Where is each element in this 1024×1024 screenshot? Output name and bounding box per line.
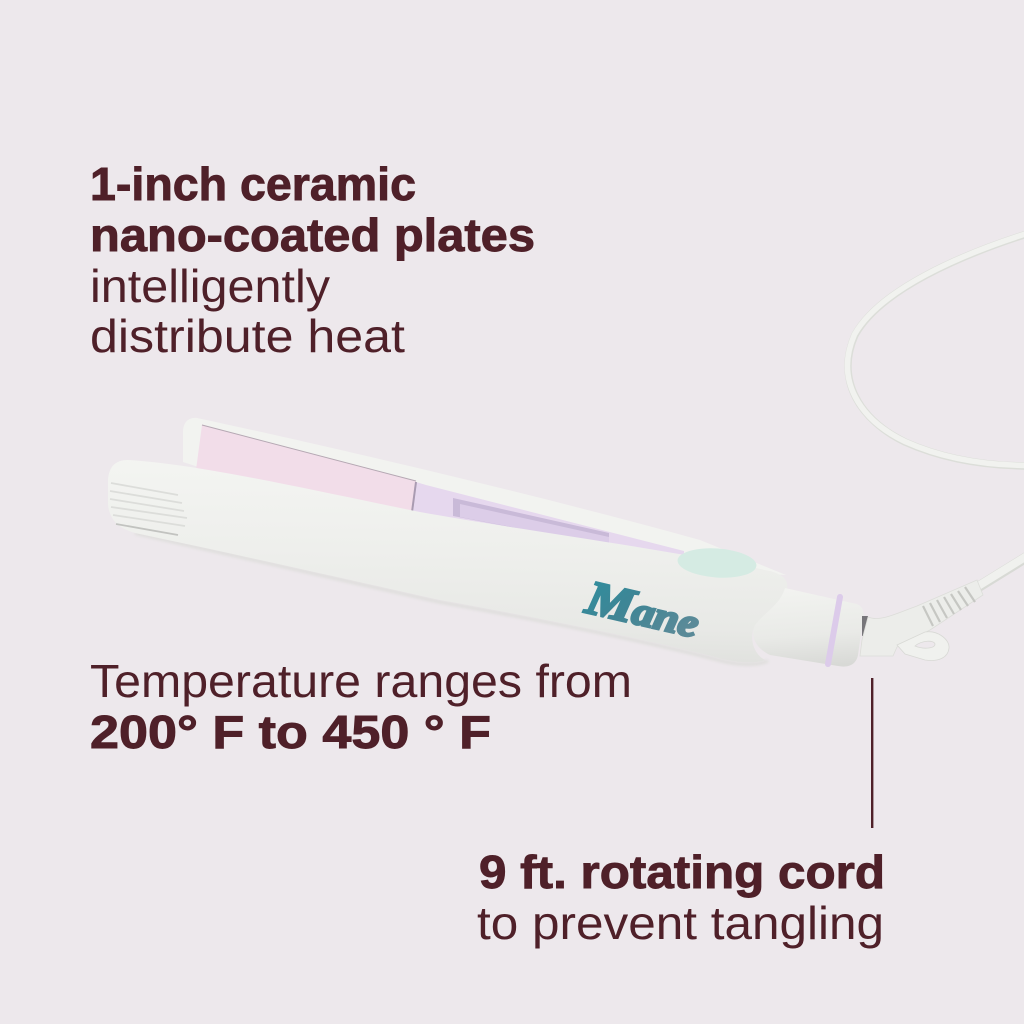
upper arm xyxy=(183,418,786,575)
heading: ceramic plates: nano-coated plates xyxy=(90,209,535,261)
pink plate xyxy=(196,425,416,512)
plate joint xyxy=(412,482,416,512)
illustration: flat iron xyxy=(108,232,1024,667)
text: temperature range: 200° F to 450 ° F xyxy=(90,706,491,758)
plate recess xyxy=(453,498,609,546)
text: temperature range: Temperature ranges from xyxy=(90,655,632,707)
heading: ceramic plates: 1-inch ceramic xyxy=(90,158,416,210)
brand logo: Mane xyxy=(580,571,705,648)
callout line xyxy=(871,678,873,828)
text: rotating cord: to prevent tangling xyxy=(477,897,884,949)
text: temperature range xyxy=(90,655,632,758)
lilac ring xyxy=(828,597,840,664)
strain relief ridges xyxy=(923,587,975,626)
lower arm body xyxy=(108,460,787,662)
collar gap xyxy=(862,616,868,636)
lower arm shadow xyxy=(135,533,768,664)
heading: ceramic plates xyxy=(90,158,535,362)
power cord xyxy=(848,232,1024,589)
text: rotating cord: 9 ft. rotating cord xyxy=(479,846,885,898)
mint button xyxy=(677,546,757,580)
hanging loop xyxy=(897,632,949,660)
grip ridges xyxy=(110,483,187,535)
heading: ceramic plates: distribute heat xyxy=(90,310,405,362)
text: rotating cord xyxy=(477,846,885,949)
plate top edge xyxy=(202,425,416,481)
strain relief xyxy=(860,580,983,656)
lilac plate xyxy=(412,482,684,565)
swivel collar xyxy=(753,588,864,667)
heading: ceramic plates: intelligently xyxy=(90,260,330,312)
